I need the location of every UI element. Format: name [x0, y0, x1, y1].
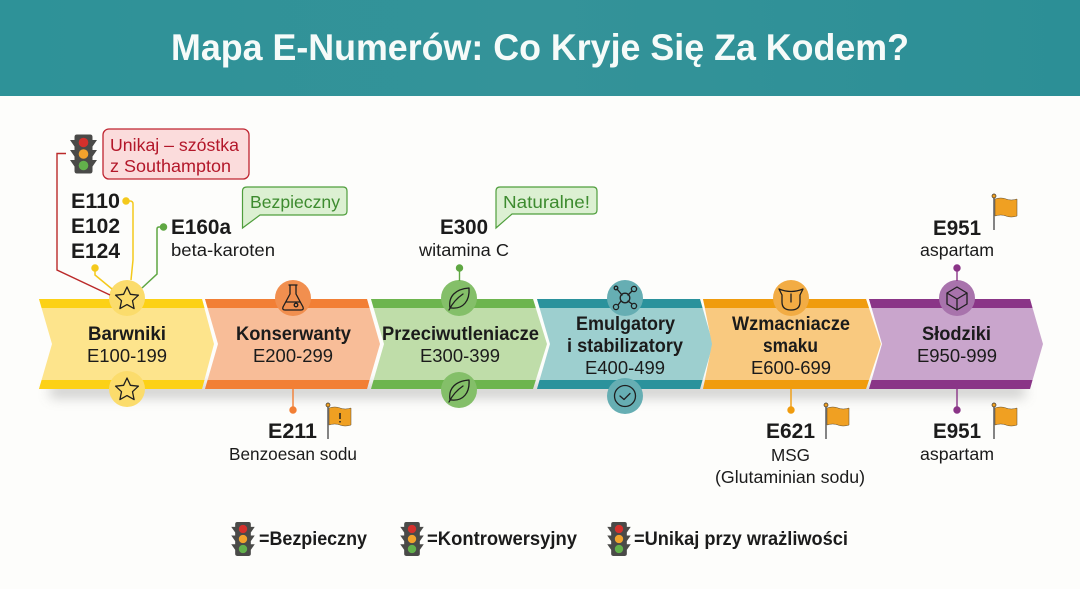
- connector: red: [57, 154, 110, 295]
- callout: Bezpieczny: Bezpieczny: [250, 192, 340, 212]
- label: Emulgatory: i stabilizatory: [567, 336, 683, 357]
- text: E211: [229, 420, 357, 464]
- icon: flag top: [992, 194, 1017, 230]
- text: E110 E102 E124: E110: [71, 190, 120, 213]
- text: E951 top: aspartam: [920, 240, 994, 260]
- connector: E951 top: [954, 265, 960, 281]
- callout: Unikaj: Unikaj – szóstka: [110, 135, 239, 155]
- label: Konserwanty: Konserwanty: [236, 324, 351, 345]
- panel: Emulgatory: [537, 280, 713, 414]
- label: Emulgatory: Emulgatory: [576, 314, 675, 335]
- label: Barwniki: E100-199: [87, 346, 167, 366]
- text: E621: [715, 420, 865, 487]
- text: E160a: [171, 216, 275, 260]
- panel: Barwniki: [39, 280, 214, 407]
- label: Emulgatory: E400-499: [585, 358, 665, 378]
- label: Wzmacniacze: [732, 314, 850, 378]
- icon: star top: [109, 280, 145, 316]
- icon: cube: [939, 280, 975, 316]
- label: Barwniki: Barwniki: [88, 324, 166, 345]
- label: Słodziki: [917, 324, 997, 366]
- connector: green: [142, 224, 166, 288]
- text: E160a: beta-karoten: [171, 240, 275, 260]
- callout: Naturalne: Naturalne!: [503, 192, 590, 212]
- label: Wzmacniacze: smaku: [763, 336, 818, 357]
- connector: E211: [290, 389, 296, 413]
- callout: Unikaj: z Southampton: [110, 156, 231, 176]
- panel: Wzmacniacze smaku: [703, 280, 881, 389]
- callout: Bezpieczny: [242, 187, 347, 228]
- callout: Unikaj: [103, 129, 249, 179]
- legend item: Kontrowersyjny: [400, 522, 577, 556]
- text: E110 E102 E124: E102: [71, 215, 120, 238]
- connector: yellow lower: [92, 265, 112, 289]
- chevron shadow: [50, 384, 1025, 398]
- icon: tongue: [773, 280, 809, 316]
- callout: Naturalne: [496, 187, 597, 228]
- label: Przeciwutleniacze: E300-399: [420, 346, 500, 366]
- icon: flag E951 bottom: [992, 403, 1017, 439]
- label: Emulgatory: [567, 314, 683, 378]
- legend item: Kontrowersyjny: =Kontrowersyjny: [427, 529, 577, 550]
- text: E211: Benzoesan sodu: [229, 444, 357, 464]
- connector: E951 bottom: [954, 389, 960, 413]
- text: E160a: E160a: [171, 216, 231, 239]
- icon: leaf top: [441, 280, 477, 316]
- text: E300: [418, 216, 509, 260]
- panel: Konserwanty: [205, 280, 380, 389]
- text: E951 bottom: [920, 420, 994, 464]
- text: E621: MSG: [771, 445, 810, 465]
- text: E300: witamina C: [418, 240, 509, 260]
- label: Przeciwutleniacze: [382, 324, 539, 366]
- label: Barwniki: [87, 324, 167, 366]
- label: Konserwanty: E200-299: [253, 346, 333, 366]
- label: Konserwanty: [236, 324, 351, 366]
- label: Wzmacniacze: E600-699: [751, 358, 831, 378]
- panel: Słodziki: [869, 280, 1043, 389]
- panel: Przeciwutleniacze: [371, 280, 547, 408]
- text: E211: E211: [268, 420, 317, 443]
- label: Przeciwutleniacze: Przeciwutleniacze: [382, 324, 539, 345]
- icon: flag E621: [824, 403, 849, 439]
- legend item: Bezpieczny: [231, 522, 367, 556]
- title: Mapa E-Numerów: Co Kryje Się Za Kodem?: [171, 27, 909, 68]
- icon: flask: [275, 280, 311, 316]
- legend item: Bezpieczny: =Bezpieczny: [259, 529, 367, 550]
- text: E951 top: E951: [933, 217, 981, 240]
- legend item: Unikaj: [607, 522, 848, 556]
- icon: traffic light top: [70, 134, 97, 174]
- icon: leaf bottom: [441, 372, 477, 408]
- legend item: Unikaj: =Unikaj przy wrażliwości: [634, 529, 848, 550]
- text: E951 top: [920, 217, 994, 260]
- icon: star bottom: [109, 371, 145, 407]
- text: E621: E621: [766, 420, 815, 443]
- label: Słodziki: Słodziki: [922, 324, 991, 345]
- icon: check: [607, 378, 643, 414]
- icon: molecule: [607, 280, 643, 316]
- text: E110 E102 E124: E124: [71, 240, 120, 263]
- text: E951 bottom: E951: [933, 420, 981, 443]
- connector: E300: [456, 265, 462, 281]
- icon: flag warning: [326, 403, 351, 439]
- connector: yellow upper: [123, 198, 133, 280]
- legend: [231, 522, 848, 556]
- text: E951 bottom: aspartam: [920, 444, 994, 464]
- header banner: [0, 0, 1080, 96]
- connector: E621: [788, 389, 794, 413]
- label: Słodziki: E950-999: [917, 346, 997, 366]
- text: E110 E102 E124: [71, 190, 120, 263]
- text: E300: E300: [440, 216, 488, 239]
- text: E621: (Glutaminian sodu): [715, 467, 865, 487]
- label: Wzmacniacze: Wzmacniacze: [732, 314, 850, 335]
